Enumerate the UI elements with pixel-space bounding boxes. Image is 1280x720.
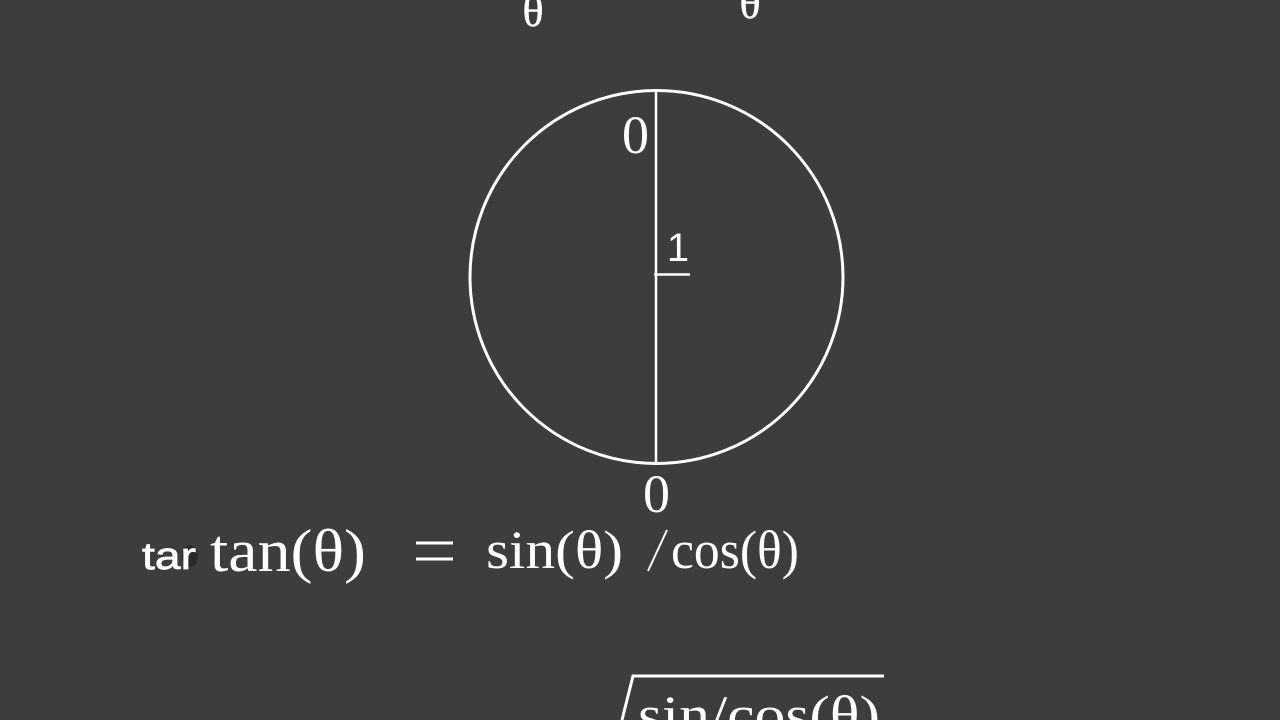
diagram: circle with vertical diameter [470,90,843,524]
radius tick [654,273,690,276]
label: bottom zero: 0 [643,464,670,524]
equals sign [416,543,453,559]
label: one: 1 [667,226,689,270]
label: top zero: 0 [622,105,649,165]
radical sign [622,676,884,720]
equation: tangent identity [142,518,799,584]
vertical diameter [655,90,657,463]
division slash [648,530,667,571]
term: tan theta: tan(θ) [210,518,366,584]
term: cos theta: cos(θ) [671,520,799,580]
term: sin theta: sin(θ) [486,520,623,580]
smudge behind partial tan [182,545,198,567]
top labels: theta symbols [522,0,761,36]
equation: square root of sin over cos, cut off at bottom [622,676,884,720]
ghost text: partial tan: tar [142,536,196,578]
circle outline [470,90,843,464]
